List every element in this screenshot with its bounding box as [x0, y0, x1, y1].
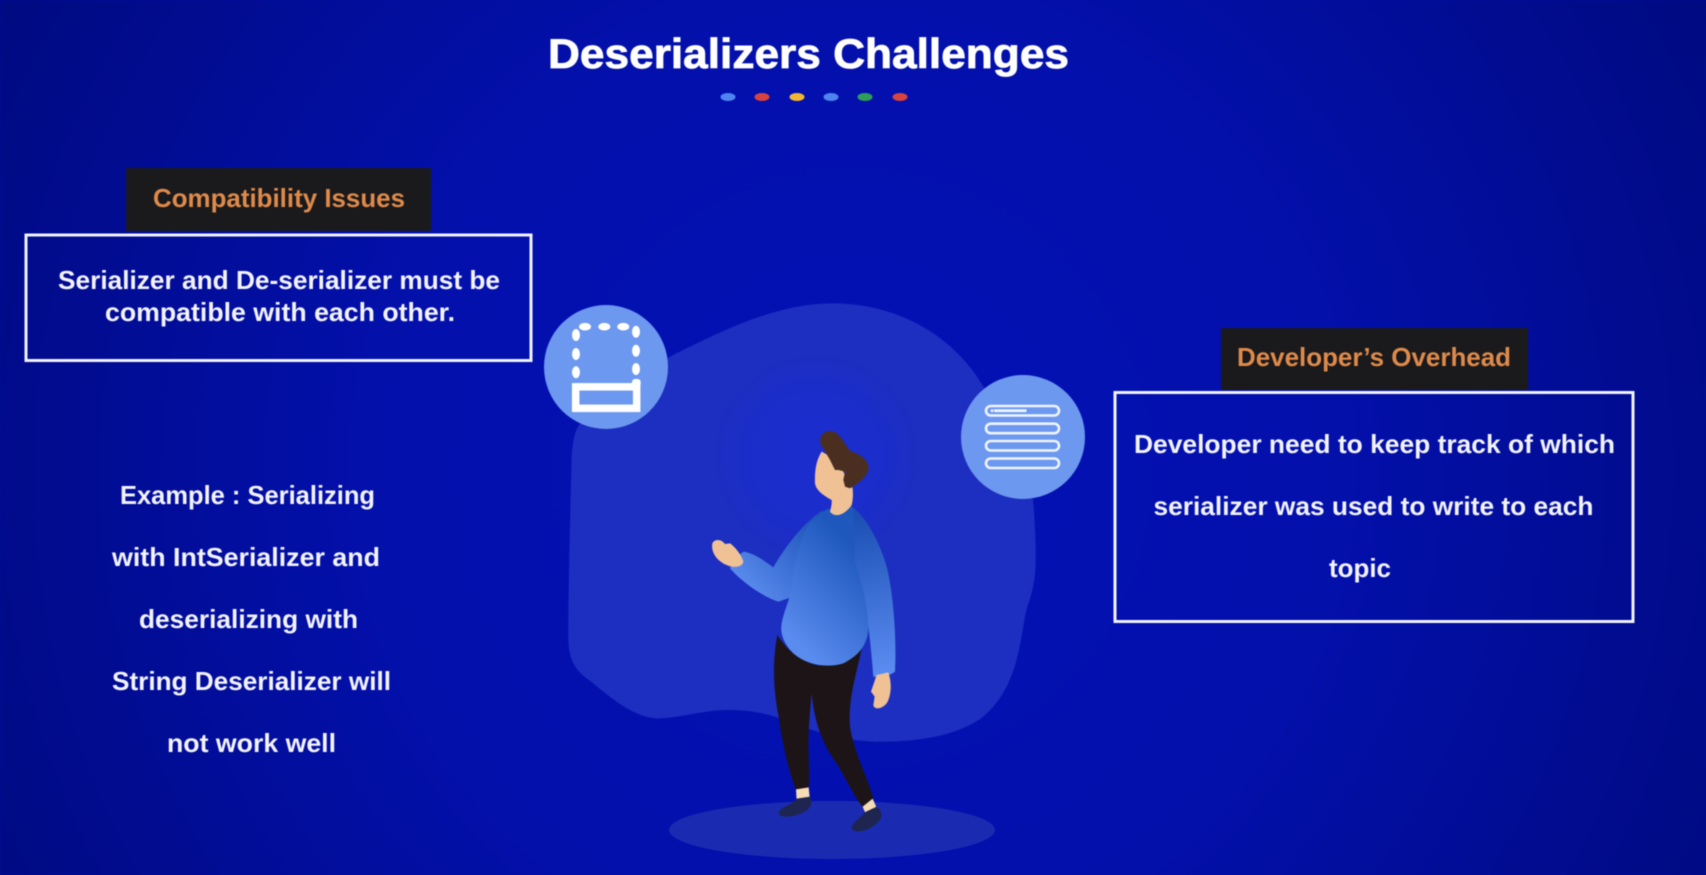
left hand — [712, 540, 743, 567]
badge: developer's overhead — [1221, 328, 1528, 390]
example text block — [111, 480, 391, 758]
right arm — [837, 505, 895, 677]
socks — [796, 787, 877, 815]
box: overhead text: serializer was used to write to each — [1154, 491, 1594, 521]
example text block: with IntSerializer and — [111, 542, 380, 572]
box: overhead text — [1115, 392, 1633, 622]
example text block: Example : Serializing — [120, 480, 375, 510]
box: overhead text: Developer need to keep track of which — [1134, 429, 1615, 459]
title: Deserializers Challenges — [548, 30, 1069, 77]
shoes — [779, 797, 882, 832]
panel: developer's overhead — [1115, 328, 1633, 622]
background blob — [568, 303, 1036, 742]
example text block: String Deserializer will — [112, 666, 391, 696]
badge: compatibility issues — [126, 168, 431, 231]
hair — [820, 431, 869, 488]
colored dots row — [720, 93, 908, 101]
example text block: not work well — [167, 728, 336, 758]
torso — [781, 505, 868, 666]
box: compatibility text: Serializer and De-serializer must be — [58, 265, 500, 295]
icon: dashed box — [544, 305, 668, 429]
example text block: deserializing with — [139, 604, 358, 634]
trousers — [774, 635, 873, 807]
left arm — [730, 510, 823, 602]
badge: compatibility issues: Compatibility Issues — [153, 183, 405, 213]
ground ellipse — [669, 801, 995, 859]
figure: person looking up — [712, 431, 895, 832]
box: compatibility text — [26, 235, 531, 360]
box: overhead text: topic — [1329, 553, 1391, 583]
icon: list rows — [961, 375, 1085, 499]
neck and face — [815, 452, 853, 515]
right hand — [871, 672, 891, 708]
badge: developer's overhead: Developer’s Overhead — [1237, 342, 1511, 372]
panel: compatibility issues — [26, 168, 531, 360]
box: compatibility text: compatible with each other. — [105, 297, 455, 327]
